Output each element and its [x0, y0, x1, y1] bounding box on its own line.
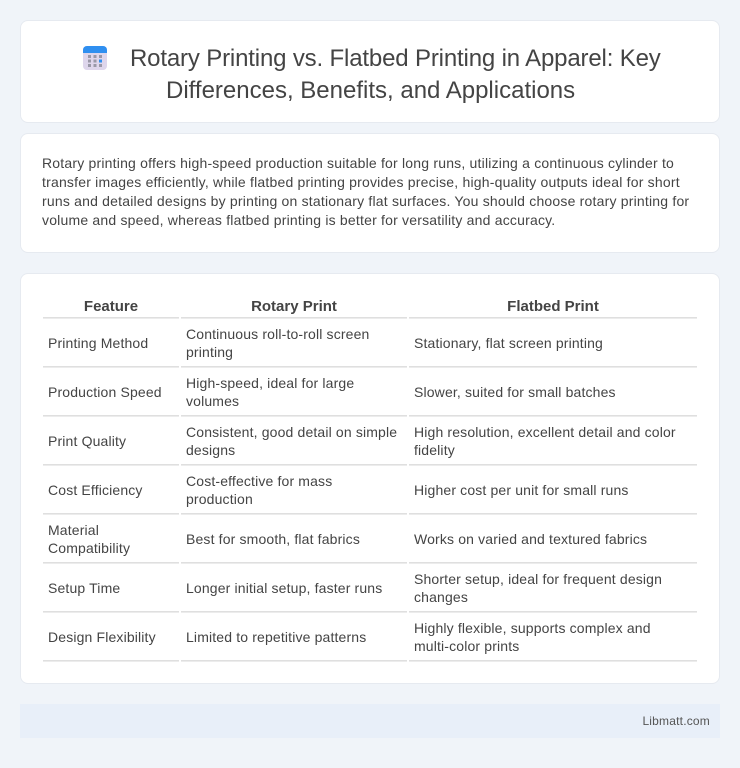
comparison table: Works on varied and textured fabrics [414, 531, 647, 547]
comparison table: High-speed, ideal for large [186, 375, 354, 391]
row: production speed: Production Speed [48, 384, 162, 400]
title [130, 45, 661, 104]
comparison table: Cost-effective for mass [186, 473, 332, 489]
header: flatbed print: Flatbed Print [507, 298, 599, 315]
intro text [42, 155, 689, 228]
comparison table: Limited to repetitive patterns [186, 629, 366, 645]
row: material compatibility: Compatibility [48, 540, 130, 556]
comparison table: Higher cost per unit for small runs [414, 482, 629, 498]
comparison table: Stationary, flat screen printing [414, 335, 603, 351]
comparison table [43, 298, 697, 662]
row: material compatibility [48, 522, 130, 556]
row: design flexibility: Design Flexibility [48, 629, 156, 645]
title: Rotary Printing vs. Flatbed Printing in Apparel: Key [130, 45, 661, 72]
comparison table: volumes [186, 393, 239, 409]
comparison table: Continuous roll-to-roll screen [186, 326, 369, 342]
title: Differences, Benefits, and Applications [166, 77, 575, 104]
comparison table: Slower, suited for small batches [414, 384, 616, 400]
header panel [20, 20, 720, 123]
table panel [20, 273, 720, 684]
row: material compatibility: Material [48, 522, 99, 538]
comparison table: production [186, 491, 253, 507]
footer text: Libmatt.com [642, 714, 710, 728]
intro text: transfer images efficiently, while flatbed printing provides precise, high-quality outputs ideal for short [42, 174, 680, 190]
header: feature: Feature [84, 298, 138, 315]
intro text: volume and speed, whereas flatbed printing is better for versatility and accuracy. [42, 212, 555, 228]
comparison table: Shorter setup, ideal for frequent design [414, 571, 662, 587]
row: setup time: Setup Time [48, 580, 120, 596]
icon: calendar grid [83, 46, 107, 70]
comparison table: fidelity [414, 442, 455, 458]
intro text: Rotary printing offers high-speed production suitable for long runs, utilizing a continuous cylinder to [42, 155, 674, 171]
comparison table: Highly flexible, supports complex and [414, 620, 651, 636]
comparison table: Best for smooth, flat fabrics [186, 531, 360, 547]
row: cost efficiency: Cost Efficiency [48, 482, 143, 498]
intro text: runs and detailed designs by printing on stationary flat surfaces. You should choose rotary printing for [42, 193, 689, 209]
row: printing method: Printing Method [48, 335, 148, 351]
footer bar [20, 704, 720, 738]
comparison table: designs [186, 442, 235, 458]
comparison table: Longer initial setup, faster runs [186, 580, 382, 596]
comparison table: changes [414, 589, 468, 605]
comparison table: Consistent, good detail on simple [186, 424, 397, 440]
comparison table: High resolution, excellent detail and color [414, 424, 676, 440]
comparison table: multi-color prints [414, 638, 519, 654]
comparison table: printing [186, 344, 233, 360]
row: print quality: Print Quality [48, 433, 126, 449]
intro panel [20, 133, 720, 253]
header: rotary print: Rotary Print [251, 298, 337, 315]
